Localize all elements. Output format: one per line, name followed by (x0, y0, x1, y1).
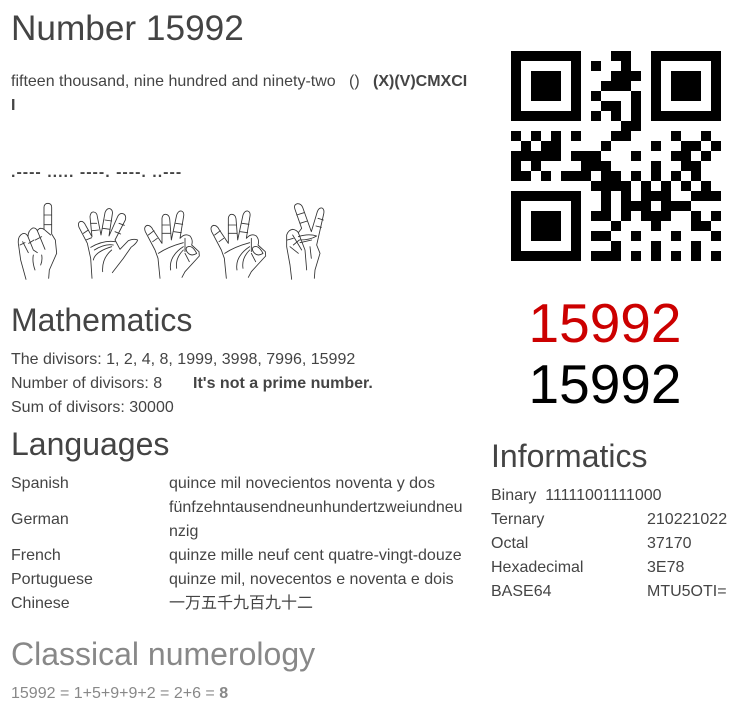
Hexadecimal row: Hexadecimal (491, 559, 583, 576)
heading: informatics: Informatics (491, 438, 647, 474)
Hexadecimal row: 3E78 (647, 559, 684, 576)
title: Number 15992 (11, 9, 244, 48)
Spanish row: Spanish (11, 475, 69, 492)
German row: nzig (169, 523, 198, 540)
icon: hand one (18, 203, 57, 279)
QR code (511, 51, 721, 261)
Chinese row: 一万五千九百九十二 (169, 595, 313, 612)
Binary row: Binary 11111001111000 (491, 487, 662, 504)
number in words and roman numeral (11, 73, 467, 114)
icon: hand five (78, 209, 138, 278)
French row (11, 547, 462, 564)
large number in black: 15992 (529, 353, 681, 415)
panel: languages (11, 426, 463, 612)
Chinese row (11, 594, 313, 612)
icon: hand nine (145, 211, 199, 278)
Octal row (491, 535, 692, 552)
French row: quinze mille neuf cent quatre-vingt-douze (169, 547, 462, 564)
Portuguese row (11, 571, 454, 588)
Octal row: 37170 (647, 535, 692, 552)
roman numeral wrapped character: I (11, 97, 15, 114)
German row (11, 499, 463, 540)
words: fifteen thousand, nine hundred and ninety-two () (11, 73, 360, 90)
Octal row: Octal (491, 535, 528, 552)
BASE64 row: BASE64 (491, 583, 551, 600)
French row: French (11, 547, 61, 564)
BASE64 row: MTU5OTI= (647, 583, 727, 600)
number of divisors: Number of divisors: 8 (11, 375, 162, 392)
roman numeral: (X)(V)CMXCI (373, 73, 467, 90)
panel: mathematics (11, 302, 373, 416)
German row: German (11, 511, 69, 528)
panel: informatics (491, 438, 727, 600)
icon: hand nine second (211, 211, 266, 278)
Ternary row: Ternary (491, 511, 544, 528)
large number in red: 15992 (529, 292, 681, 354)
icon: hand two (287, 204, 324, 279)
heading: classical numerology: Classical numerology (11, 636, 315, 672)
Portuguese row: Portuguese (11, 571, 93, 588)
Spanish row (11, 475, 435, 492)
QR data modules (511, 51, 721, 261)
QR finder patterns (511, 51, 721, 261)
prime note: It's not a prime number. (193, 375, 373, 392)
morse code: .---- ..... ----. ----. ..--- (11, 164, 182, 181)
heading: mathematics: Mathematics (11, 302, 192, 338)
German row: fünfzehntausendneunhundertzweiundneu (169, 499, 463, 516)
BASE64 row (491, 583, 727, 600)
heading: languages: Languages (11, 426, 169, 462)
Hexadecimal row (491, 559, 684, 576)
Spanish row: quince mil novecientos noventa y dos (169, 475, 435, 492)
numerology calculation: 15992 = 1+5+9+9+2 = 2+6 = 8 (11, 685, 228, 702)
Ternary row (491, 511, 727, 528)
Chinese row: Chinese (11, 595, 70, 612)
divisors: The divisors: 1, 2, 4, 8, 1999, 3998, 7996, 15992 (11, 351, 355, 368)
sum of divisors: Sum of divisors: 30000 (11, 399, 174, 416)
icon: sign language hands (18, 202, 324, 280)
Ternary row: 210221022 (647, 511, 727, 528)
panel: classical numerology (11, 636, 315, 702)
Portuguese row: quinze mil, novecentos e noventa e dois (169, 571, 454, 588)
